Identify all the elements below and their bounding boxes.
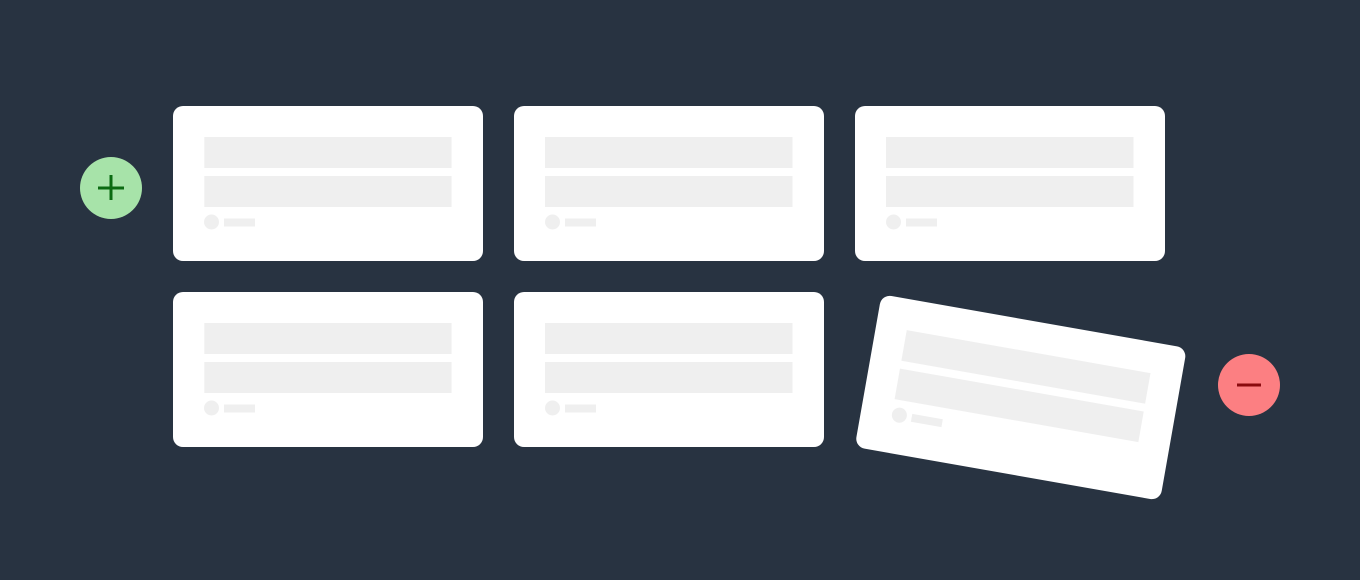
card: row 1 column 3	[855, 106, 1165, 261]
card: row 2 column 2	[514, 292, 824, 447]
card: row 1 column 2	[514, 106, 824, 261]
card: tilted card being removed	[855, 294, 1187, 501]
icon: red remove button	[1218, 354, 1280, 416]
icon: green add button	[80, 157, 142, 219]
card: row 1 column 1	[173, 106, 483, 261]
card: row 2 column 1	[173, 292, 483, 447]
